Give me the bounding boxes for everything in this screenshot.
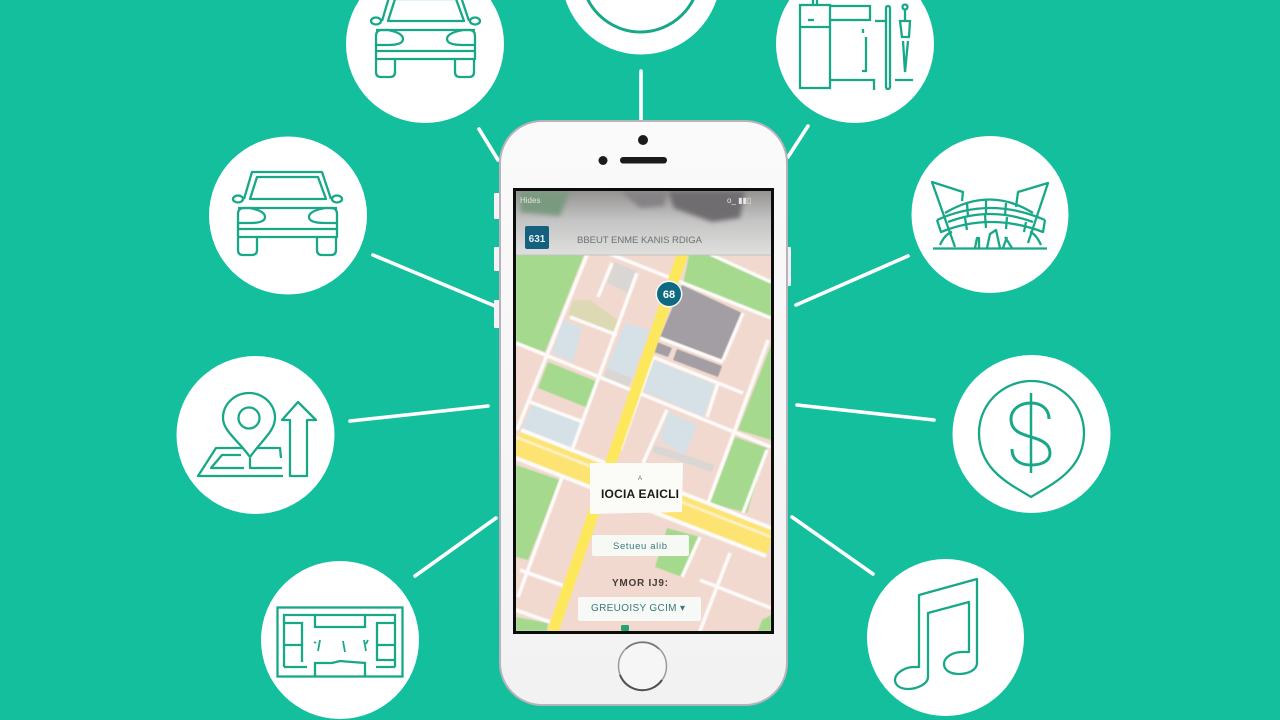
front camera	[638, 135, 648, 145]
white streets	[516, 250, 771, 631]
map base	[516, 256, 771, 631]
tab marker	[621, 625, 629, 631]
select pill	[578, 597, 701, 621]
phone	[494, 121, 791, 705]
location pin: 68	[663, 289, 675, 301]
side buttons	[494, 193, 791, 328]
map screen	[516, 191, 771, 631]
icon: map pin with arrow	[176, 356, 334, 514]
status icons: o_ ▮▮▯	[727, 196, 751, 205]
sensor dot	[598, 156, 608, 165]
destination card	[590, 463, 683, 514]
select pill: GREUOISY GCIM ▾	[591, 603, 685, 614]
time label: YMOR IJ9:	[612, 578, 668, 589]
home button	[618, 642, 666, 690]
icon: top ring	[562, 0, 720, 54]
icon: dollar pin	[952, 355, 1110, 513]
header text: BBEUT ENME KANIS RDIGA	[577, 235, 703, 246]
icon: car top left	[346, 0, 504, 123]
screen frame	[514, 189, 773, 633]
badge text: 631	[529, 234, 546, 245]
action pill	[592, 535, 689, 556]
status text: Hides	[520, 196, 540, 205]
app badge	[525, 226, 549, 249]
speaker	[620, 157, 667, 164]
icon: music note	[867, 559, 1024, 716]
location pin	[656, 280, 682, 308]
icon: car left	[209, 136, 367, 294]
action pill: Setueu alib	[613, 541, 667, 552]
yellow roads	[516, 250, 771, 631]
icon: floor plan	[261, 561, 419, 719]
map blocks	[516, 250, 771, 631]
destination card: A	[638, 476, 642, 482]
connector lines	[350, 71, 934, 576]
phone body	[500, 121, 787, 705]
top app bar	[516, 191, 771, 255]
icon: appliances and fixtures	[776, 0, 934, 123]
destination card: IOCIA EAICLI	[601, 487, 679, 501]
icon: stadium	[912, 136, 1068, 293]
